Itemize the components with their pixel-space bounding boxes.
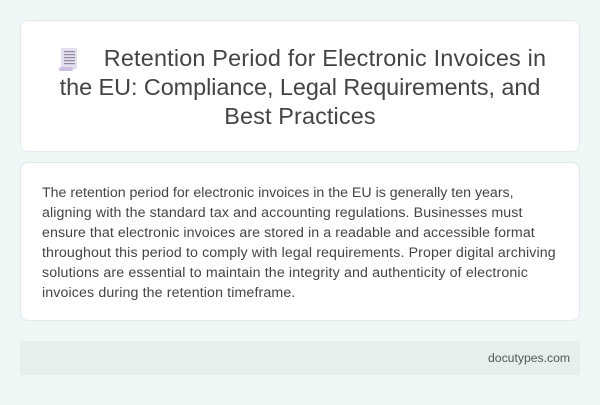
panel: title card — [20, 20, 580, 152]
panel: description card — [20, 162, 580, 321]
body text: The retention period for electronic invoices in the EU is generally ten years, — [42, 185, 514, 201]
body text: invoices during the retention timeframe. — [42, 285, 295, 301]
body text: aligning with the standard tax and accounting regulations. Businesses must — [42, 205, 523, 221]
footer source text: docutypes.com — [488, 351, 570, 365]
heading line 1: Retention Period for Electronic Invoices in — [104, 45, 546, 71]
footer bar — [20, 341, 580, 375]
body text: ensure that electronic invoices are stored in a readable and accessible format — [42, 225, 535, 241]
body text — [42, 185, 556, 301]
heading line 2: the EU: Compliance, Legal Requirements, and — [60, 74, 540, 100]
body text: throughout this period to comply with legal requirements. Proper digital archiving — [42, 245, 556, 261]
body text: solutions are essential to maintain the integrity and authenticity of electronic — [42, 265, 528, 281]
icon: receipt — [59, 48, 77, 71]
heading line 3: Best Practices — [224, 103, 376, 129]
